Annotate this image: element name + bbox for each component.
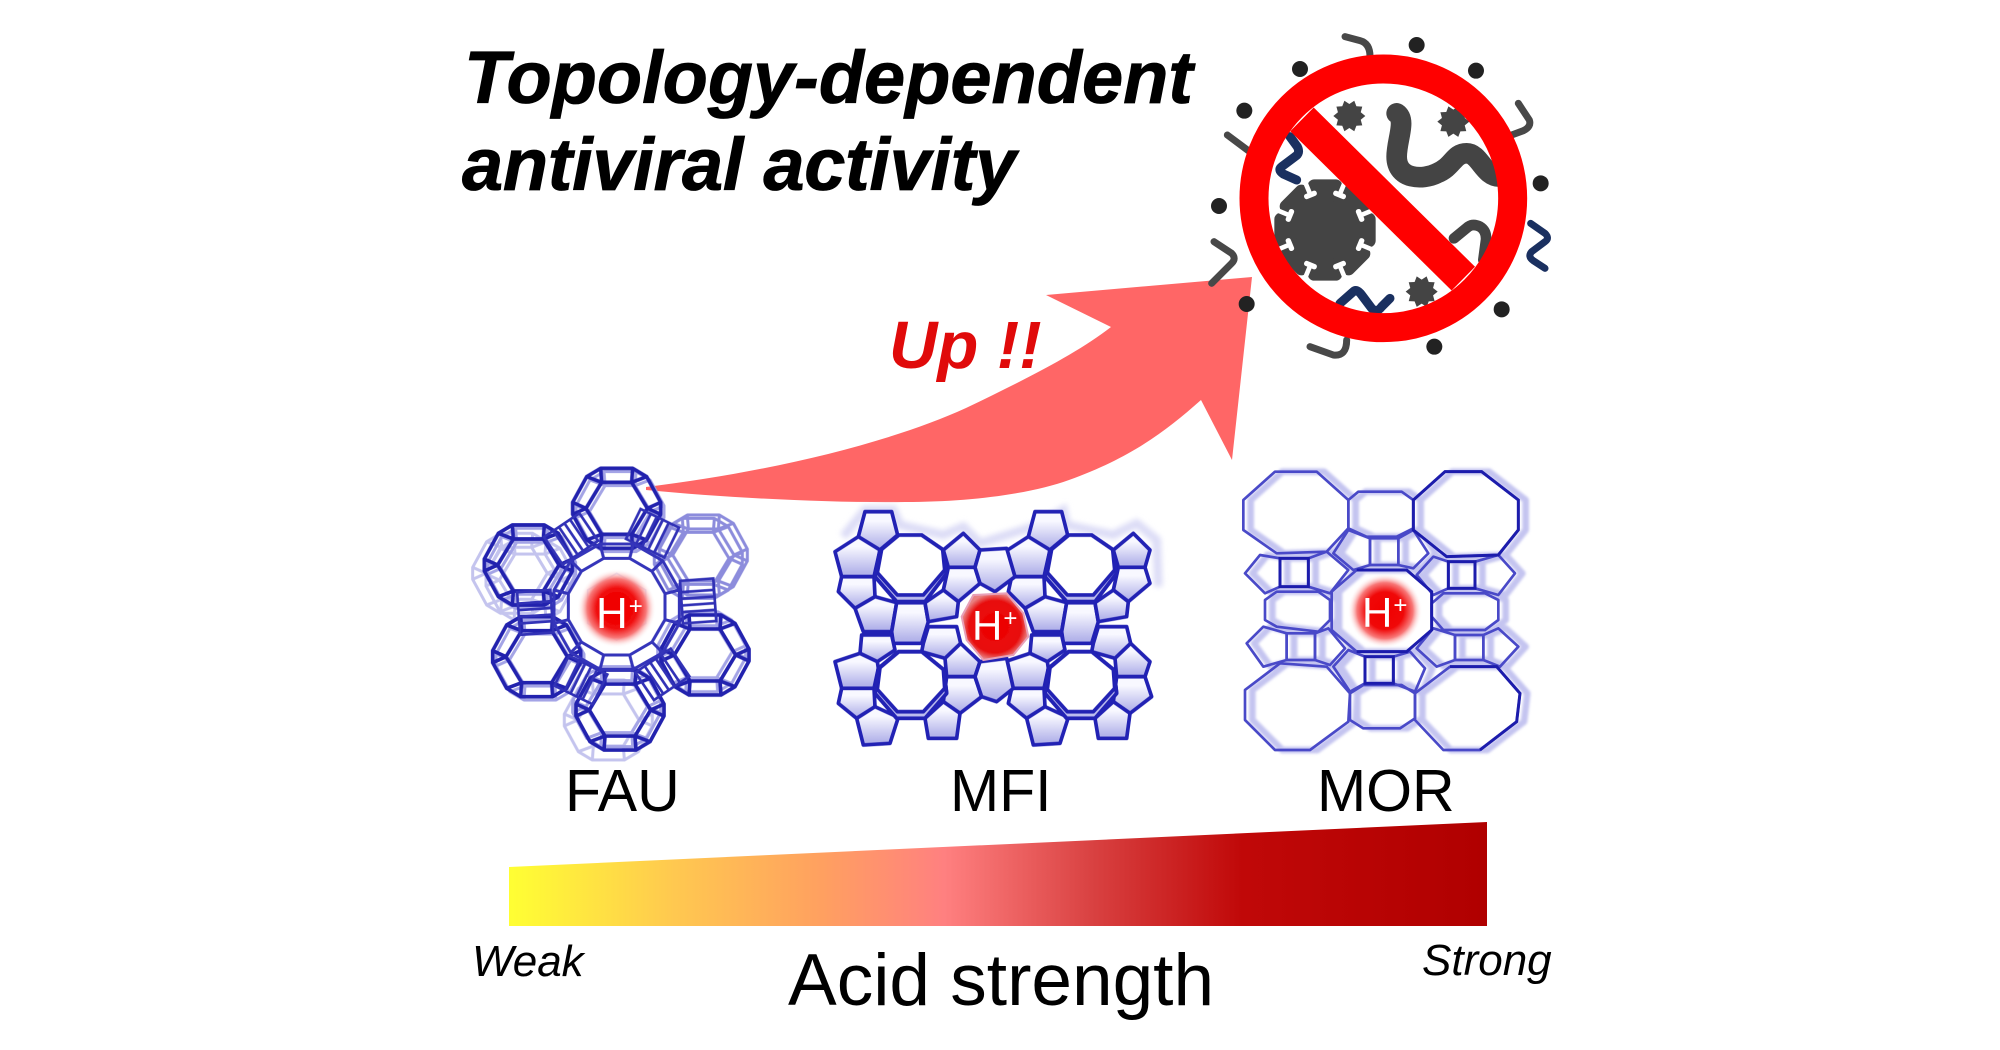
FAU proton label: H [596,589,628,638]
icon: no virus symbol [1211,37,1549,355]
MOR proton label: H [1362,589,1392,636]
label: Strong: Strong [1422,936,1552,985]
arrow label: Up !! [889,308,1042,383]
dark accents [1280,472,1520,750]
hook [1454,225,1486,260]
shadow layers [1251,472,1527,750]
zeolite: MFI [835,510,1158,745]
dark cages [484,468,749,750]
acid strength gradient wedge [509,822,1487,926]
central ring [554,544,679,669]
big virus [1274,179,1376,281]
red prohibition ring [1254,69,1513,328]
navy zig-zags [1280,137,1547,310]
label: MFI: MFI [950,758,1052,824]
label: FAU: FAU [565,758,680,824]
double-wall shading [488,472,746,747]
zeolite: MOR [1243,472,1527,750]
acid site glow [577,569,656,648]
FAU proton label: + [629,593,643,620]
faded back layer [473,533,652,760]
faded cage [654,515,747,598]
title: antiviral activity [462,123,1020,206]
central hexagons [975,548,1015,702]
thick worm [1397,113,1500,177]
label: MOR: MOR [1317,758,1455,824]
MOR proton label: + [1393,592,1407,619]
MFI proton label: H [972,602,1002,649]
small viruses [1333,101,1469,307]
particles [1211,37,1549,355]
halo [843,510,1158,587]
acid site glow [1348,573,1422,648]
prisms [517,509,716,704]
grey hooks [1212,37,1530,355]
main frame [1243,472,1520,750]
framework lines [835,512,1152,745]
label: Acid strength: Acid strength [788,940,1214,1021]
arrow: rising activity [646,277,1252,502]
MFI proton label: + [1003,605,1017,632]
zeolite: FAU [473,468,749,760]
title: Topology-dependent [464,36,1196,119]
acid site blob [962,593,1028,660]
label: Weak: Weak [472,937,586,986]
